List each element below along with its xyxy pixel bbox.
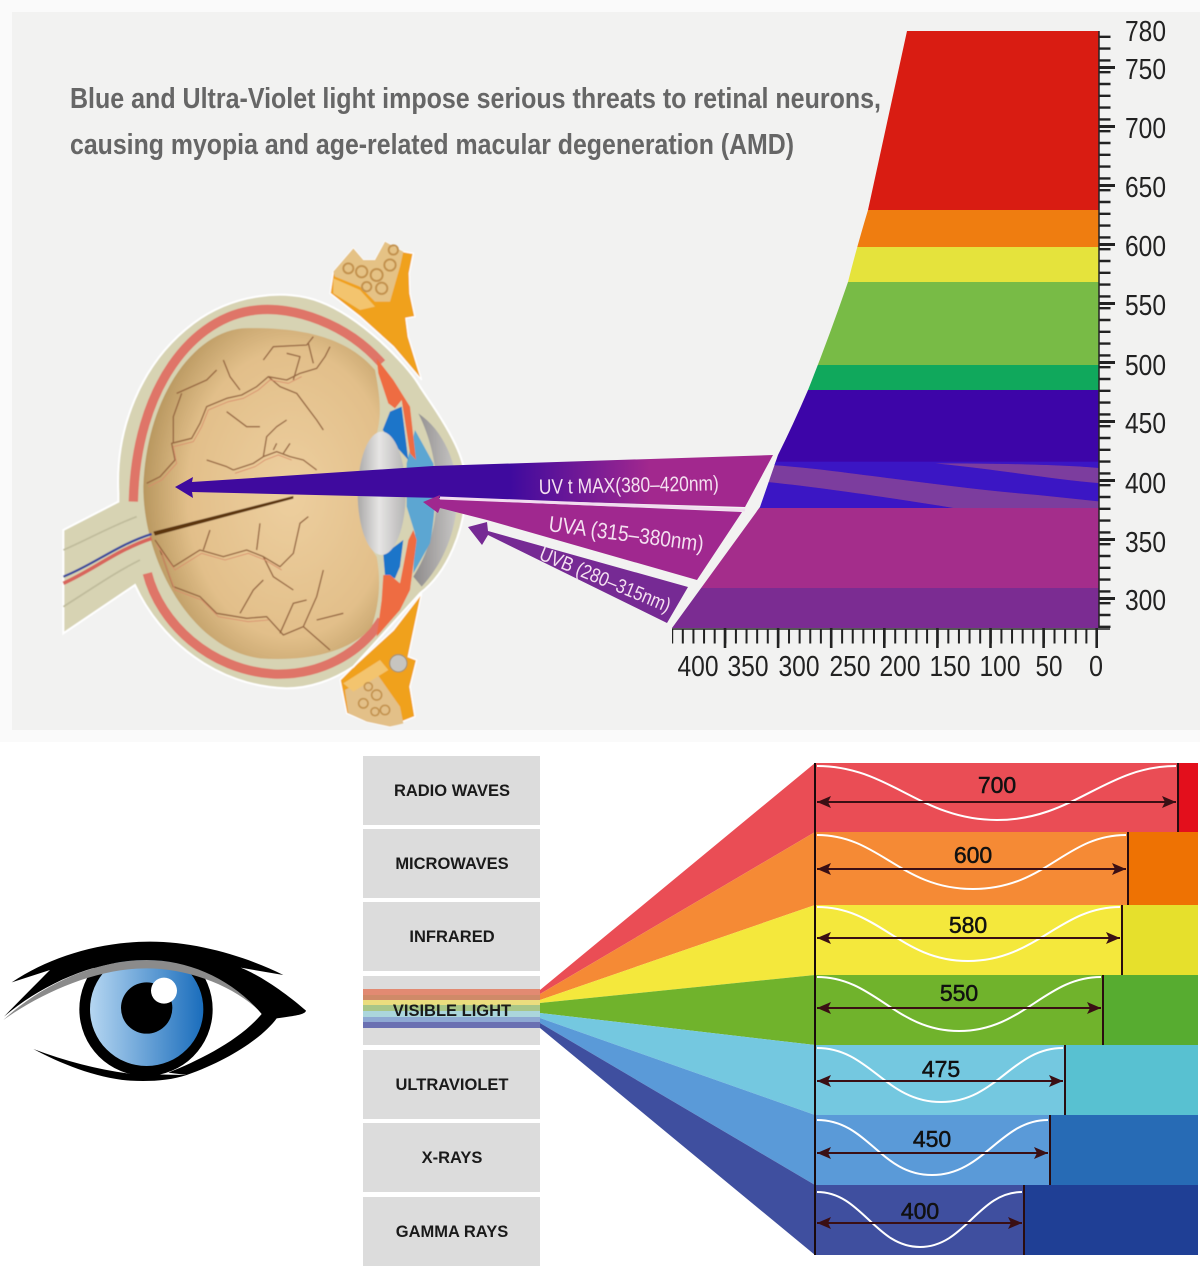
wavelength bar: 475: 475: [922, 1056, 960, 1082]
lower lid: [33, 1049, 187, 1081]
arrow separator highlight: [440, 498, 745, 510]
bottom axis ticks: [672, 629, 1110, 638]
central axis line: [153, 496, 293, 536]
ciliary body: [377, 358, 417, 637]
right axis labels: 650: [1125, 172, 1166, 204]
spectrum chart: [660, 31, 1107, 628]
iris: [90, 953, 203, 1066]
band: dark green: [808, 365, 1098, 390]
bottom axis labels: 200: [880, 651, 920, 683]
title: Blue and Ultra-Violet light impose serious threats to retinal neurons,: [70, 83, 881, 115]
arrow: UVB: [468, 522, 688, 623]
wavelength bar: 475: [815, 1045, 1198, 1115]
right axis labels: [1125, 16, 1166, 617]
bottom axis labels: 350: [728, 651, 768, 683]
wavelength bar: 580: [815, 905, 1198, 975]
wavelength bar: 450: 450: [913, 1126, 951, 1152]
wavelength bar: 600: [815, 832, 1198, 905]
bottom axis labels: 50: [1036, 651, 1062, 683]
bottom axis labels: 100: [980, 651, 1020, 683]
bottom axis labels: [678, 651, 1103, 683]
iris ring: [79, 943, 213, 1076]
band: magenta: [660, 508, 1100, 588]
spectrum list labels: X-RAYS: [422, 1149, 482, 1167]
right axis labels: 350: [1125, 527, 1166, 559]
spectrum list labels: INFRARED: [409, 928, 495, 946]
iris: [407, 430, 435, 573]
wavelength bar: 700: [815, 763, 1198, 832]
arrow: UVA: [423, 495, 742, 580]
lens: [358, 432, 406, 555]
right axis labels: 500: [1125, 350, 1166, 382]
bottom axis labels: 0: [1089, 651, 1103, 683]
spectrum list labels: ULTRAVIOLET: [395, 1076, 509, 1094]
bottom axis labels: 400: [678, 651, 718, 683]
top panel background: [0, 0, 1200, 742]
right axis labels: 550: [1125, 290, 1166, 322]
right axis labels: 780: [1125, 16, 1166, 48]
right axis labels: 700: [1125, 113, 1166, 145]
band: red: [868, 31, 1098, 210]
wavelength bar: 400: [815, 1185, 1198, 1255]
right axis ticks: [1099, 31, 1107, 628]
spectrum list labels: [393, 782, 511, 1241]
spectrum list labels: GAMMA RAYS: [396, 1223, 508, 1241]
sclera and optic nerve: [63, 295, 466, 688]
band: purple: [660, 588, 1100, 628]
wavelength bar: 700: 700: [978, 772, 1016, 798]
band: UV mix: [756, 462, 1098, 512]
band: yellow: [848, 247, 1098, 282]
label: UVB: UVB (280–315nm): [536, 543, 674, 617]
zonule blue: [383, 407, 408, 578]
cornea: [413, 413, 457, 587]
arrow: UV t MAX: [175, 455, 773, 507]
optic nerve vessels: [63, 534, 152, 583]
eye anatomy illustration: [63, 242, 466, 727]
eyelid shadow: [3, 960, 260, 1020]
right axis labels: 400: [1125, 468, 1166, 500]
spectrum list labels: MICROWAVES: [395, 855, 509, 873]
highlight: [151, 978, 177, 1004]
band: orange: [857, 210, 1098, 247]
right axis labels: 450: [1125, 408, 1166, 440]
stylized eye icon: [3, 942, 306, 1081]
right axis labels: 600: [1125, 231, 1166, 263]
title: [70, 83, 881, 161]
upper lid: [4, 942, 306, 1075]
band: blue: [774, 390, 1098, 465]
spectrum list labels: VISIBLE LIGHT: [393, 1002, 511, 1020]
right axis labels: 750: [1125, 54, 1166, 86]
wavelength bar: 450: [815, 1115, 1198, 1185]
vitreous body: [143, 328, 380, 659]
retinal vessels: [147, 337, 343, 650]
wavelength bar: 550: 550: [940, 980, 978, 1006]
prism fan: [540, 763, 815, 1255]
wavelength bar: 550: [815, 975, 1198, 1045]
label: UV t MAX: UV t MAX(380–420nm): [539, 472, 719, 499]
wavelength bar: 600: 600: [954, 842, 992, 868]
bottom axis labels: 300: [778, 651, 820, 683]
label: UVA: UVA (315–380nm): [547, 511, 705, 556]
wavelength bar: 400: 400: [901, 1198, 939, 1224]
bone: upper orbit: [330, 242, 422, 380]
band: green: [818, 282, 1098, 365]
spectrum list boxes: [363, 756, 540, 1266]
pupil: [121, 982, 172, 1034]
choroid ring: [133, 309, 382, 674]
visible light stripe: [363, 989, 540, 1028]
baseline marker: [814, 763, 816, 1255]
wavelength bar: 580: 580: [949, 912, 987, 938]
bottom axis labels: 250: [830, 651, 870, 683]
bottom axis labels: 150: [930, 651, 970, 683]
right axis labels: 300: [1125, 585, 1166, 617]
spectrum list labels: RADIO WAVES: [394, 782, 510, 800]
nerve sheath stripes: [63, 517, 140, 607]
bone: lower orbit: [340, 593, 422, 727]
title: causing myopia and age-related macular degeneration (AMD): [70, 129, 794, 161]
